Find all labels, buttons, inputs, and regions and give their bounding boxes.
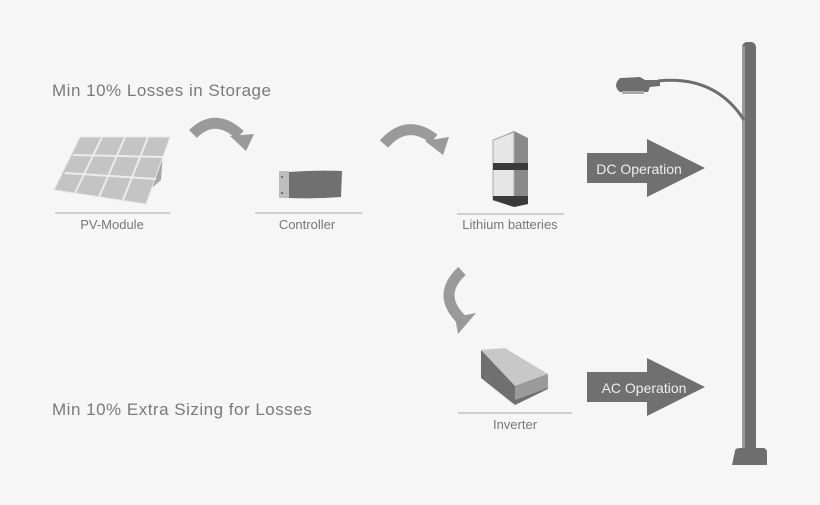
label: Inverter: Inverter <box>493 417 538 432</box>
label: Controller: Controller <box>279 217 336 232</box>
arrow: DC Operation: DC Operation <box>596 161 682 177</box>
label: Lithium batteries: Lithium batteries <box>462 217 558 232</box>
icon: PV module <box>54 137 170 204</box>
heading: extra sizing: Min 10% Extra Sizing for Losses <box>52 400 312 419</box>
label: PV-Module <box>55 213 170 232</box>
heading: storage losses: Min 10% Losses in Storage <box>52 81 271 100</box>
arrow: AC Operation <box>587 358 705 416</box>
arrow: AC Operation: AC Operation <box>602 380 686 396</box>
icon: inverter <box>481 348 548 405</box>
icon: controller <box>279 171 342 198</box>
arrow: PV to controller <box>193 123 254 151</box>
icon: street lamp <box>616 42 767 465</box>
label: Inverter <box>458 413 572 432</box>
arrow: batteries to inverter <box>449 271 476 334</box>
arrow: DC Operation <box>587 139 705 197</box>
icon: lithium batteries <box>493 131 528 207</box>
label: Controller <box>255 213 362 232</box>
arrow: controller to batteries <box>384 130 449 155</box>
label: PV-Module: PV-Module <box>80 217 144 232</box>
